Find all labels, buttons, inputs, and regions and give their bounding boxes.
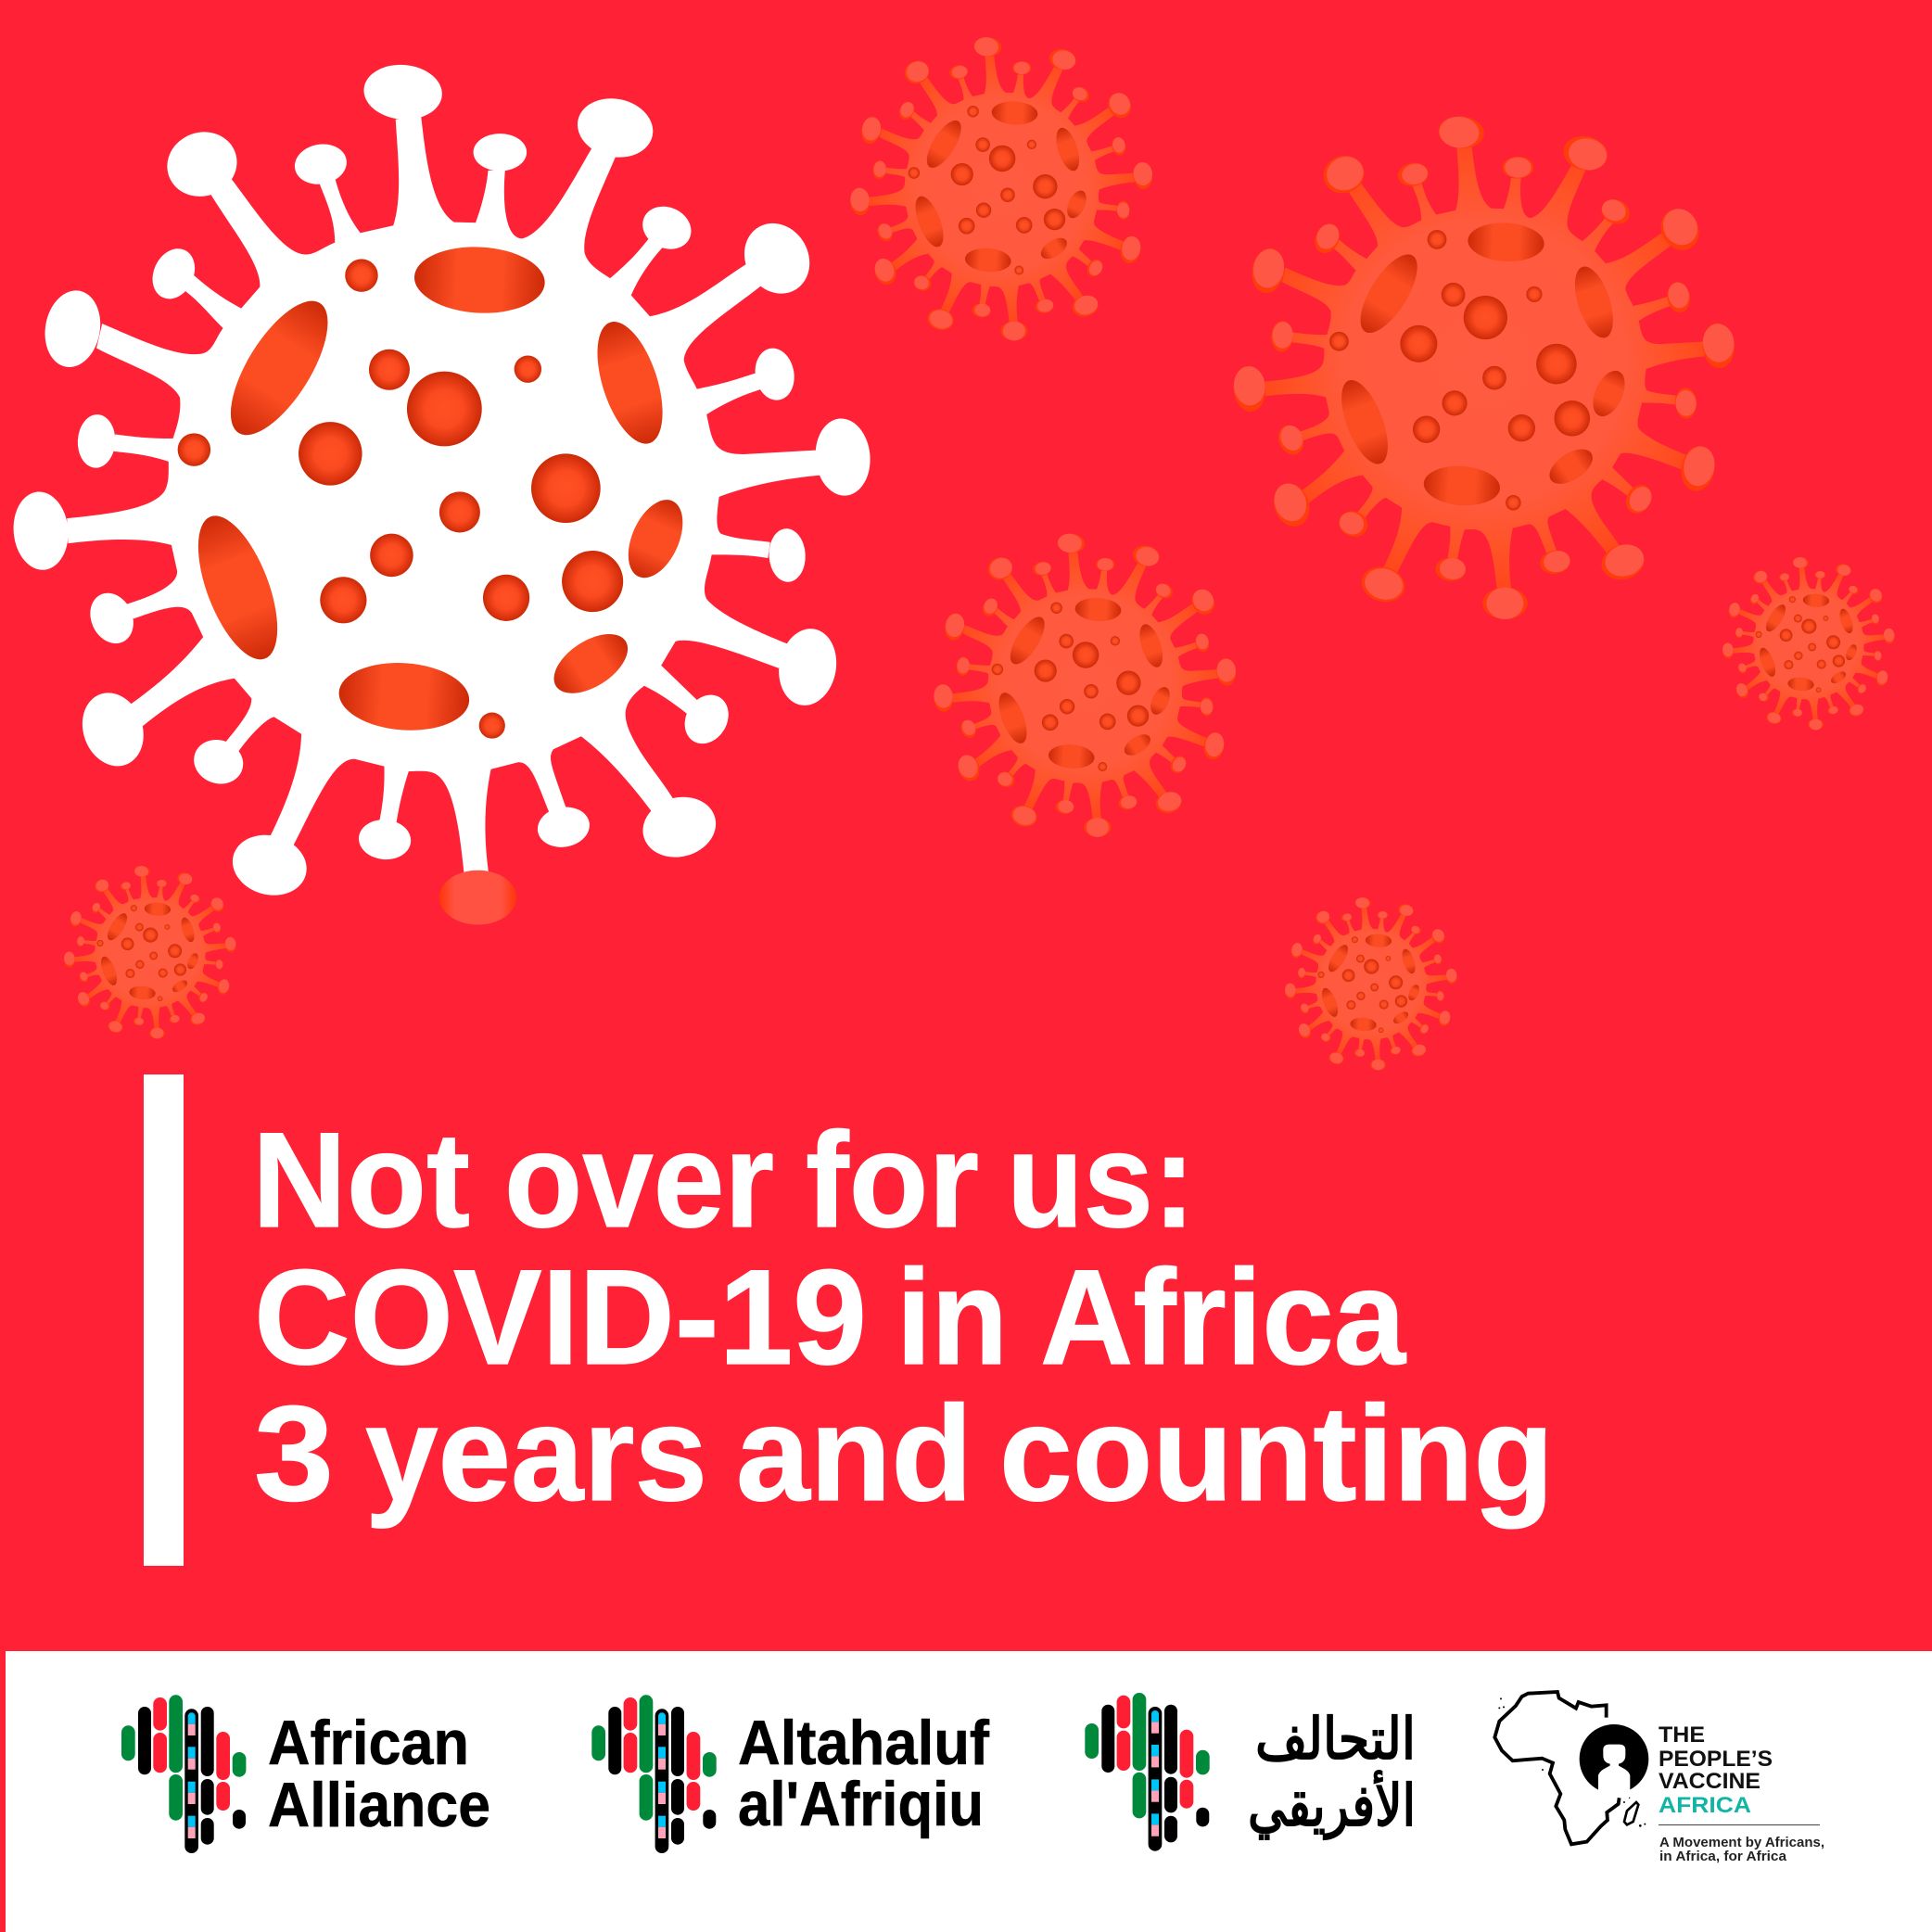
title: Africa [1040,1241,1407,1392]
title: for [806,1104,979,1255]
large orange virus top right [1232,114,1736,619]
orange virus centre [933,532,1237,837]
title: years [365,1378,707,1529]
Arabic logo mark [1085,1693,1210,1851]
logo: Arabic African Alliance [1085,1693,1416,1851]
title: 3 [254,1378,334,1529]
tagline: A Movement by Africans, [1659,1836,1824,1850]
title [252,1104,1554,1529]
Arabic wordmark: التحالف [1255,1708,1416,1772]
Africa outline icon [1494,1692,1648,1844]
white accent bar [144,1074,184,1566]
African Alliance wordmark [268,1708,490,1840]
title: and [736,1378,972,1529]
title: in [896,1241,1008,1392]
small orange virus lower centre [1284,896,1457,1070]
tagline [1659,1836,1824,1864]
African Alliance wordmark: Alliance [268,1770,490,1840]
title: Not [252,1104,470,1255]
Altahaluf wordmark: al'Afriqiu [738,1769,984,1839]
African Alliance wordmark: African [268,1708,469,1778]
Altahaluf wordmark [738,1708,989,1839]
People's Vaccine wordmark: VACCINE [1659,1769,1760,1794]
Altahaluf wordmark: Altahaluf [738,1708,989,1778]
orange virus top centre [849,36,1153,340]
logo: Altahaluf al'Afriqiu [591,1695,989,1853]
title: us: [1007,1104,1195,1255]
Altahaluf mark [591,1695,717,1853]
logo: African Alliance [121,1695,490,1853]
People's Vaccine wordmark: THE [1659,1722,1705,1748]
small orange virus lower left [63,865,236,1038]
Arabic wordmark: الأفريقي [1248,1769,1416,1841]
title: over [504,1104,774,1255]
title: COVID-19 [254,1241,867,1392]
title: counting [999,1378,1554,1529]
white logo band [6,1651,1932,1932]
African Alliance mark [121,1695,246,1853]
People's Vaccine wordmark: PEOPLE’S [1659,1747,1773,1772]
People's Vaccine wordmark [1659,1722,1773,1818]
orange spike tip [439,871,516,924]
small orange virus far right [1722,556,1895,730]
Arabic wordmark [1248,1708,1416,1841]
People's Vaccine wordmark: AFRICA [1659,1793,1751,1818]
tagline: in Africa, for Africa [1659,1849,1787,1864]
large white coronavirus [10,61,873,924]
logo: The People's Vaccine Africa [1494,1692,1824,1864]
